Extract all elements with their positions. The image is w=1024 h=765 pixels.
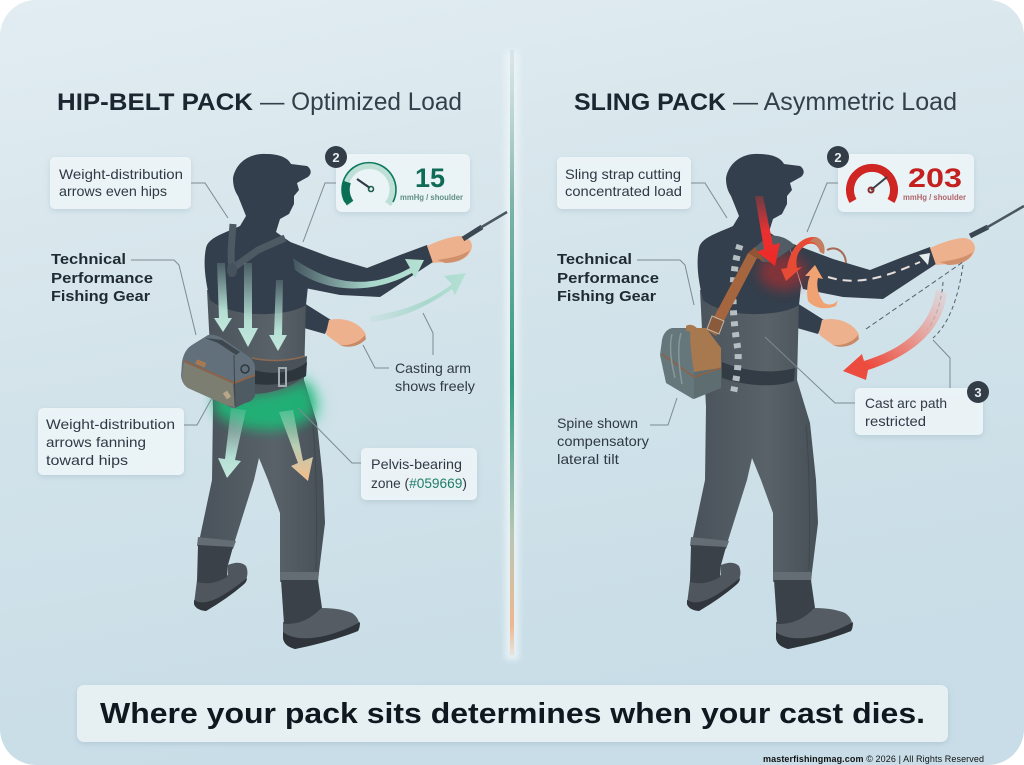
badge 2: 2 [332, 150, 340, 165]
waist belt [722, 362, 795, 385]
gauge: 15: 15 [415, 163, 445, 193]
callout: even hips [50, 157, 228, 218]
gauge: 15: mmHg / shoulder [400, 193, 463, 202]
title: sling pack [574, 88, 957, 116]
callout: sling strap: Sling strap cutting [565, 166, 681, 182]
title: hip-belt pack [57, 88, 462, 116]
label: technical gear left: Technical [51, 251, 126, 268]
gauge: 203 [807, 146, 974, 232]
bottom banner: Where your pack sits determines when your cast dies. [100, 698, 925, 730]
label: technical gear right: Performance [557, 270, 659, 287]
pelvis glow [213, 380, 316, 430]
title: sling pack: — Asymmetric Load [733, 88, 957, 116]
callout: even hips: Weight-distribution [59, 166, 183, 182]
sling strap [707, 253, 757, 336]
gauge: 203: mmHg / shoulder [903, 193, 966, 202]
sling pack [660, 325, 721, 399]
callout: fanning [38, 398, 212, 475]
waist belt [252, 356, 307, 394]
badge 3 [967, 381, 989, 403]
callout: arc: Cast arc path [865, 395, 947, 411]
shoulder pad [752, 236, 795, 262]
callout: sling strap: concentrated load [565, 183, 682, 199]
label: spine: Spine shown [557, 415, 638, 431]
fishing rod [463, 227, 482, 239]
badge 2: 2 [834, 150, 842, 165]
gauge: 15 [303, 146, 470, 242]
label: spine [557, 398, 677, 467]
figure: hip-belt wearer [194, 154, 507, 649]
center divider [505, 50, 519, 660]
callout: even hips: arrows even hips [59, 183, 167, 199]
callout: fanning: Weight-distribution [46, 416, 175, 432]
callout: arc [765, 337, 989, 435]
label: technical gear right [557, 251, 694, 305]
label: spine: compensatory [557, 433, 649, 449]
callout: pelvis: zone (#059669) [371, 475, 467, 491]
label: technical gear right: Technical [557, 251, 632, 268]
badge 2 [325, 146, 347, 168]
label: technical gear left [51, 251, 196, 335]
badge 3: 3 [974, 385, 982, 400]
harness [231, 224, 285, 268]
fishing rod [970, 227, 988, 236]
label: spine: lateral tilt [557, 451, 619, 467]
title: sling pack: SLING PACK [574, 89, 727, 116]
label: technical gear left: Fishing Gear [51, 288, 150, 305]
load arrows: hip-belt [214, 263, 313, 481]
footer: masterfishingmag.com © 2026 | All Rights Reserved [763, 754, 984, 764]
callout: fanning: arrows fanning [46, 434, 146, 450]
callout: arc: restricted [865, 413, 926, 429]
callout: casting arm: Casting arm [395, 360, 471, 376]
callout: casting arm [363, 313, 475, 394]
figure: sling wearer [687, 154, 1024, 649]
spine dashes [733, 245, 740, 395]
shoulder red glow [759, 254, 807, 290]
title: hip-belt pack: HIP-BELT PACK [57, 89, 254, 116]
callout: pelvis: Pelvis-bearing [371, 456, 462, 472]
gauge dial [850, 168, 894, 201]
callout: fanning: toward hips [46, 452, 128, 468]
label: technical gear right: Fishing Gear [557, 288, 656, 305]
badge 2 [827, 146, 849, 168]
casting arm arrows: hip-belt [293, 258, 466, 322]
callout: pelvis [298, 408, 477, 500]
title: hip-belt pack: — Optimized Load [260, 88, 462, 116]
stress arrows: sling [755, 196, 846, 308]
callout: casting arm: shows freely [395, 378, 475, 394]
arm dashed arrow [828, 253, 930, 281]
label: technical gear left: Performance [51, 270, 153, 287]
callout: sling strap [557, 157, 727, 218]
restricted cast arc [843, 262, 963, 380]
gauge dial [342, 163, 396, 204]
hip-belt pack [181, 335, 255, 408]
gauge: 203: 203 [908, 163, 962, 193]
bottom banner [77, 685, 948, 742]
